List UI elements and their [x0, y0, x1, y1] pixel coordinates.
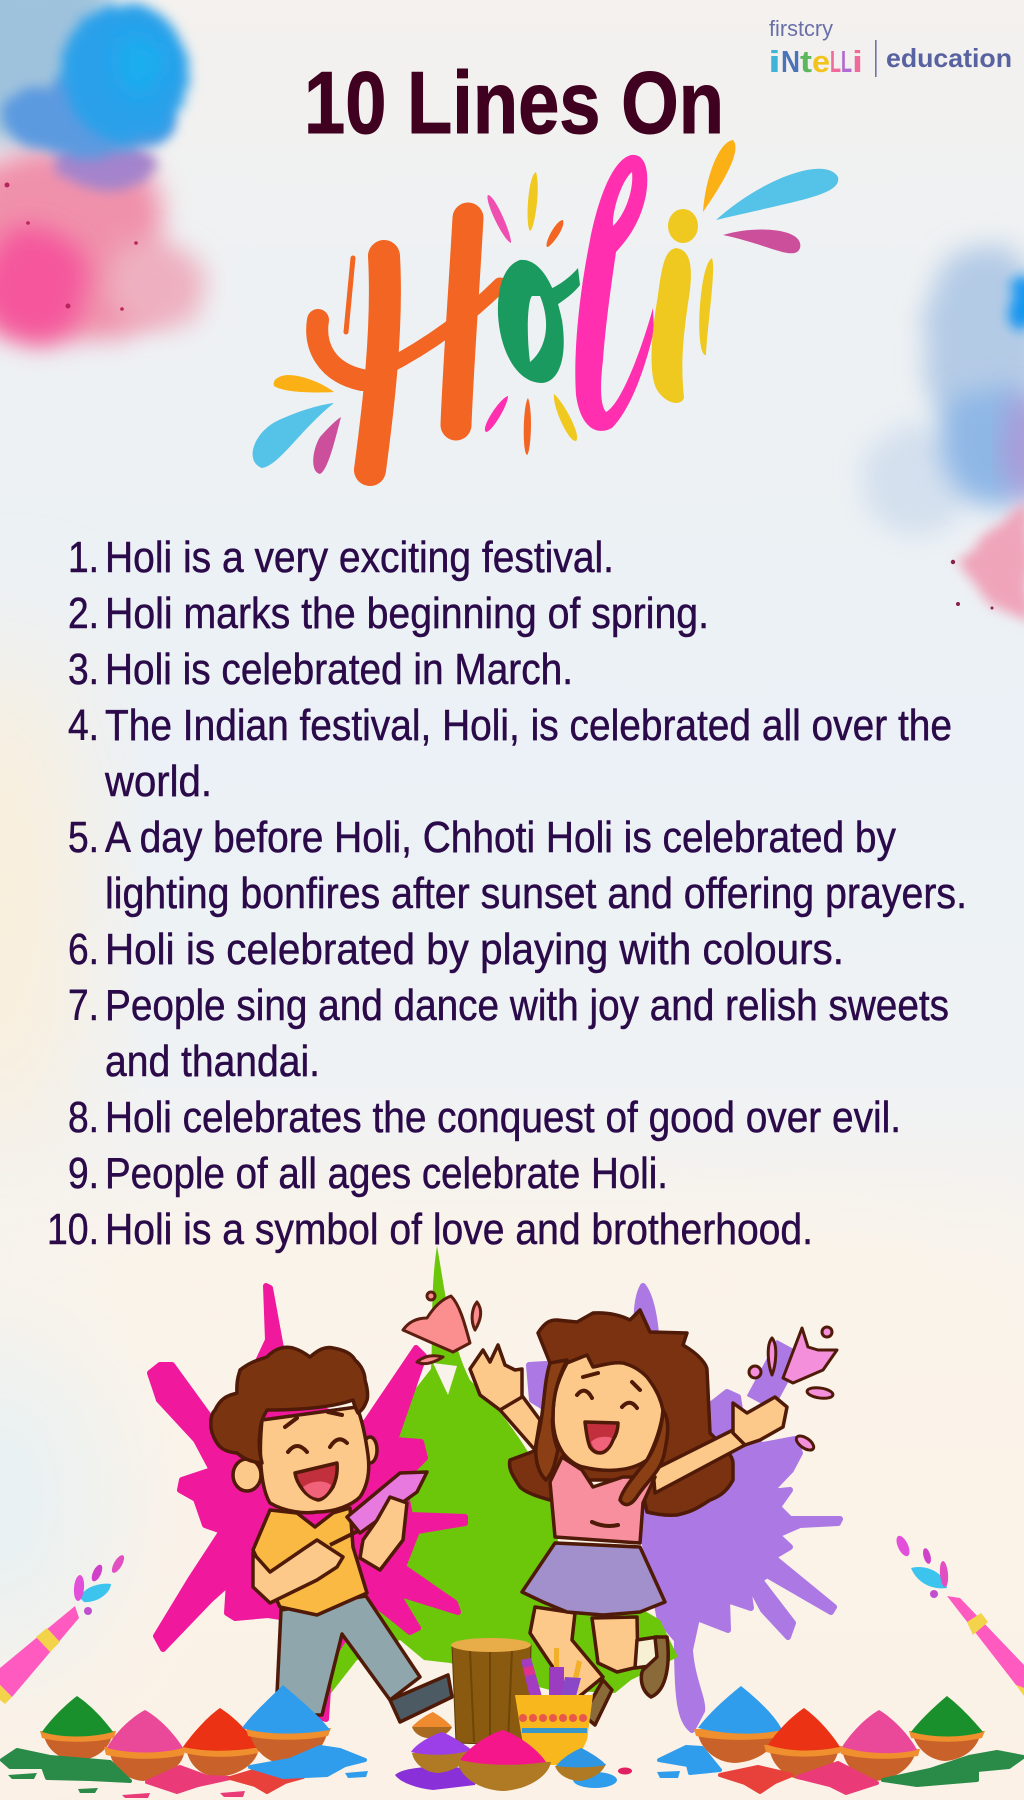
colour bowl: blue right: [694, 1686, 784, 1763]
logo: firstcry intelli education: education: [886, 43, 1012, 73]
logo: firstcry intelli education: L: [830, 44, 841, 79]
purple bowl: [412, 1750, 470, 1773]
colour bowl: green right: [909, 1696, 985, 1761]
powder cloud: top left blue and pink: [0, 0, 205, 343]
speckles: [4, 182, 138, 311]
letter i: [652, 209, 713, 403]
numbered list: 6.: [68, 925, 99, 974]
boy mouth: [295, 1463, 337, 1500]
girl right hand: [733, 1397, 787, 1445]
logo: firstcry intelli education: t: [800, 44, 812, 79]
girl back hair: [509, 1310, 733, 1515]
speckles: [951, 560, 994, 610]
colour bowl: pink left: [104, 1710, 186, 1781]
logo: firstcry intelli education: i: [852, 44, 863, 79]
paint splash over girl's left hand: [403, 1292, 481, 1364]
girl face: [553, 1355, 663, 1470]
boy hair: [211, 1347, 368, 1463]
logo: firstcry intelli education: L: [841, 44, 852, 79]
splats under right bowls: [657, 1747, 1023, 1793]
pink bowl: [457, 1760, 551, 1791]
logo: firstcry intelli education: firstcry: [769, 16, 833, 41]
firecrackers: [521, 1648, 582, 1702]
numbered list: Holi celebrates the conquest of good over evil.: [105, 1093, 901, 1142]
numbered list: Holi marks the beginning of spring.: [105, 589, 709, 638]
splash: purple: [529, 1286, 840, 1730]
logo: firstcry intelli education: e: [812, 44, 830, 79]
numbered list: People of all ages celebrate Holi.: [105, 1149, 668, 1198]
paint splashes around lettering: [253, 140, 838, 474]
girl sock: [635, 1637, 657, 1668]
colour pump: right: [894, 1534, 1024, 1696]
boy t-shirt: [253, 1508, 367, 1615]
girl right hair strand: [620, 1410, 668, 1505]
girl left leg: [530, 1607, 603, 1700]
boy ears: [233, 1437, 377, 1491]
girl mouth: [585, 1422, 618, 1453]
numbered list: Holi is a symbol of love and brotherhood.: [105, 1205, 813, 1254]
letter H: [317, 218, 500, 470]
character: boy: [211, 1347, 452, 1722]
numbered list: 3.: [68, 645, 99, 694]
colour bowl: green left: [40, 1696, 116, 1761]
girl left hand: [470, 1345, 522, 1410]
colour bowl: blue left: [242, 1685, 331, 1765]
boy eyes and brows: [285, 1412, 347, 1452]
colour bowl: pink right: [839, 1710, 920, 1781]
numbered list: 8.: [68, 1093, 99, 1142]
numbered list: Holi is a very exciting festival.: [105, 533, 614, 582]
colour bowl: red right: [764, 1708, 842, 1780]
letter o: [498, 260, 580, 383]
numbered list: 10.: [47, 1205, 99, 1254]
numbered list: world.: [104, 757, 212, 806]
numbered list: 2.: [68, 589, 99, 638]
numbered list: 1.: [68, 533, 99, 582]
title: 10 Lines On: [304, 53, 724, 152]
logo: firstcry intelli education: N: [781, 44, 800, 79]
blue splat: [573, 1772, 617, 1788]
boy shoe: [390, 1675, 452, 1722]
girl shirt: [550, 1457, 655, 1543]
boy left arm: [360, 1497, 407, 1570]
girl right arm: [653, 1430, 745, 1493]
numbered list: Holi is celebrated by playing with colours.: [105, 925, 844, 974]
Holi lettering: [253, 140, 838, 474]
purple splat: [395, 1767, 480, 1790]
numbered list: [47, 533, 967, 1254]
girl left arm: [500, 1393, 540, 1450]
drum: [451, 1638, 531, 1745]
boy right arm: [253, 1540, 343, 1603]
paint splash over girl's right hand: [749, 1327, 837, 1453]
numbered list: 7.: [68, 981, 99, 1030]
numbered list: 5.: [68, 813, 99, 862]
numbered list: 9.: [68, 1149, 99, 1198]
numbered list: Holi is celebrated in March.: [105, 645, 573, 694]
logo: firstcry intelli education: [768, 16, 1012, 79]
blue bowl: [555, 1764, 606, 1781]
colour pump: left: [0, 1553, 126, 1704]
character: girl: [470, 1310, 787, 1725]
girl left hair strand: [536, 1360, 567, 1480]
girl right leg: [592, 1617, 638, 1672]
girl shoes: [583, 1637, 668, 1725]
splash: pink: [150, 1286, 465, 1719]
decorated bucket: [515, 1695, 593, 1765]
splash: green: [323, 1246, 678, 1697]
orange bowl: [412, 1727, 452, 1738]
letter l: [575, 155, 654, 431]
boy face: [260, 1407, 369, 1513]
powder cloud: right blue and pink: [860, 240, 1024, 620]
numbered list: 4.: [68, 701, 99, 750]
girl skirt: [522, 1543, 665, 1615]
logo: firstcry intelli education: i: [768, 44, 781, 79]
boy water gun: [330, 1472, 427, 1545]
boy jeans: [276, 1596, 420, 1715]
numbered list: A day before Holi, Chhoti Holi is celebrated by: [105, 813, 896, 862]
numbered list: and thandai.: [105, 1037, 320, 1086]
splats under left bowls: [2, 1747, 368, 1798]
red dot: [618, 1768, 632, 1774]
colour bowl: red left: [183, 1708, 261, 1777]
girl eyes and brows: [577, 1373, 640, 1526]
colour bowl group: centre: [395, 1712, 632, 1791]
